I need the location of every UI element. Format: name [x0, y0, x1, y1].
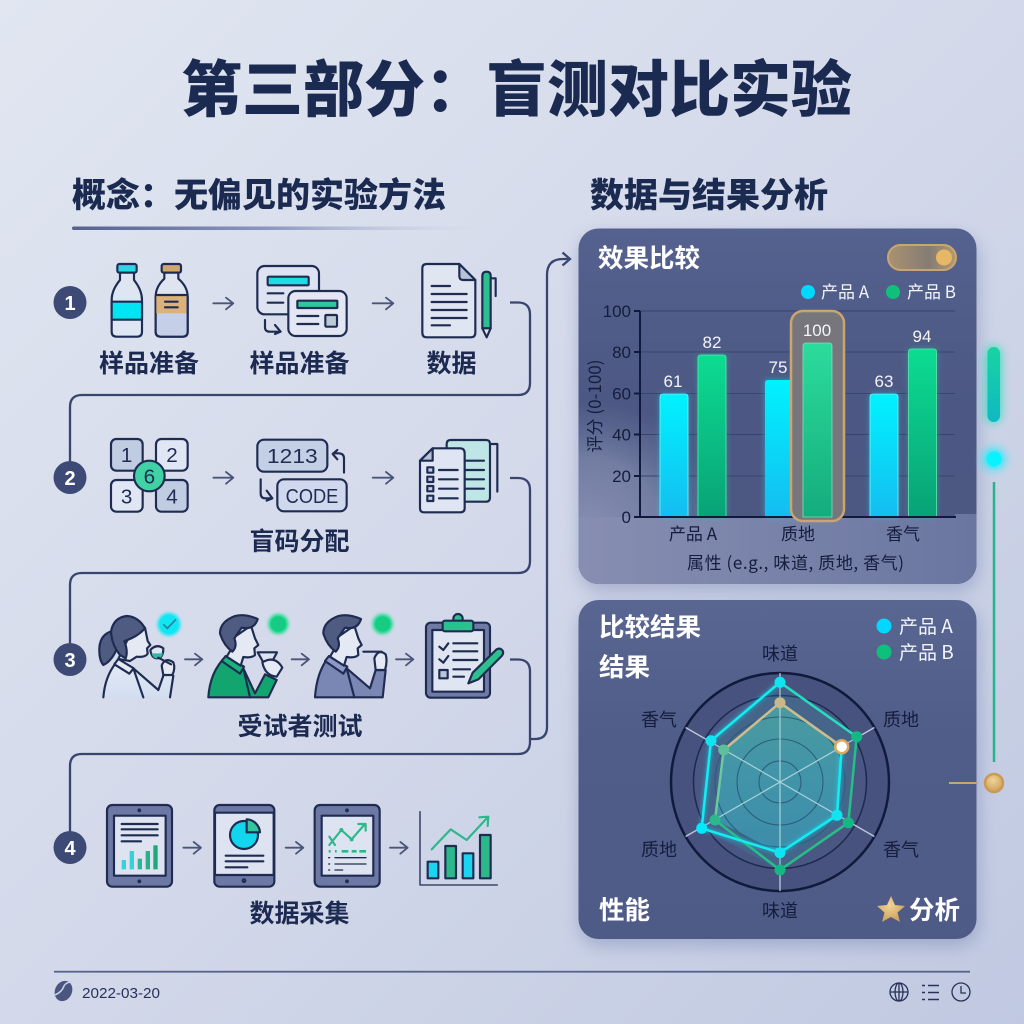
label: blind coding: 盲码分配	[249, 522, 350, 558]
radar labels: 质地	[883, 706, 919, 732]
arrow	[183, 842, 201, 854]
person: man with spoon	[315, 615, 387, 697]
icon: tablet with report	[107, 805, 172, 887]
y axis ticks: 100	[603, 302, 631, 321]
icon: number grid	[111, 439, 188, 512]
legend: 产品 B	[907, 278, 956, 303]
arrow	[373, 298, 393, 309]
y axis ticks: 20	[612, 467, 631, 486]
y axis ticks: 40	[612, 426, 631, 444]
step 4 number	[54, 831, 86, 864]
person: man drinking	[208, 615, 282, 697]
badge: green	[268, 614, 288, 634]
x axis labels: 香气	[886, 520, 920, 545]
panel title: 结果	[599, 654, 650, 682]
value labels: 94	[913, 327, 931, 346]
icon: number grid: 4	[166, 486, 178, 509]
core fill	[715, 703, 842, 853]
icon: number grid: 2	[166, 444, 178, 467]
icon: code assignment	[257, 440, 347, 511]
heading: data analysis: 数据与结果分析	[590, 168, 828, 217]
radar labels: 质地	[641, 836, 677, 862]
badge: cyan check	[158, 613, 180, 636]
toggle	[888, 245, 956, 270]
panel: radar chart	[578, 600, 978, 945]
step 2 number	[54, 461, 86, 494]
radar labels: 香气	[641, 706, 677, 732]
value labels: 63	[875, 372, 893, 391]
y axis ticks: 0	[622, 508, 631, 527]
icon: clipboard	[426, 614, 503, 698]
y axis ticks: 60	[612, 384, 631, 404]
icon: growth bar chart	[420, 812, 497, 885]
value labels: 75	[769, 358, 787, 377]
title: 第三部分：盲测对比实验	[181, 40, 852, 129]
icon: tablet with line chart	[315, 805, 380, 887]
series A line	[702, 682, 842, 853]
legend: 产品 A	[821, 278, 870, 303]
value labels: 100	[803, 321, 831, 340]
arrow	[185, 654, 202, 665]
arrow	[213, 472, 233, 484]
highlight box	[791, 311, 844, 521]
icon: number grid: 1	[121, 444, 132, 467]
badge: green	[373, 614, 393, 634]
icon: bottle B	[156, 264, 188, 337]
footer logo	[51, 978, 76, 1004]
icon: tablet with pie chart	[214, 805, 274, 887]
footer date: 2022-03-20	[82, 985, 160, 1002]
label: analysis: 分析	[909, 890, 960, 927]
side indicator: cyan dot	[984, 449, 1004, 469]
step 3 number: 3	[64, 650, 76, 672]
step 1 number	[54, 286, 86, 319]
icon: number grid: 3	[121, 486, 132, 509]
x axis labels	[669, 520, 920, 545]
panel title	[599, 614, 701, 682]
legend: 产品 A	[899, 612, 953, 639]
y axis ticks	[603, 302, 631, 527]
label: data collection: 数据采集	[249, 894, 350, 930]
step 3 icons	[99, 613, 503, 698]
icon: star	[877, 896, 905, 922]
arrow	[390, 842, 408, 854]
label: data: 数据	[426, 344, 477, 380]
icon: code assignment: 1213	[267, 445, 318, 468]
arrow	[286, 842, 303, 854]
points	[696, 677, 862, 876]
step 4 number: 4	[64, 838, 76, 860]
x axis labels: 质地	[781, 520, 815, 545]
panel: bar chart	[578, 228, 978, 590]
step 2 icons	[111, 439, 497, 512]
icon: number grid: 6	[144, 465, 155, 488]
axes	[634, 311, 956, 517]
arrow	[396, 654, 413, 665]
panel title: 效果比较	[598, 238, 701, 275]
radar labels: 味道	[762, 897, 798, 923]
glow	[702, 682, 842, 853]
radar labels: 味道	[762, 640, 798, 666]
step 1 number: 1	[64, 293, 76, 315]
radar labels: 香气	[883, 836, 919, 862]
radar	[671, 673, 889, 891]
x axis labels: 产品 A	[669, 520, 718, 545]
icon: code assignment: CODE	[286, 485, 338, 508]
step 2 number: 2	[64, 468, 76, 490]
step 3 number	[54, 643, 86, 676]
legend: 产品 B	[899, 638, 954, 665]
label: sample prep 1: 样品准备	[99, 344, 199, 380]
icon: pen	[482, 272, 496, 337]
icon: bottle A	[112, 264, 142, 337]
side indicator: line	[993, 482, 995, 762]
arrow	[373, 472, 393, 484]
bars	[660, 349, 936, 517]
flow connectors	[70, 252, 570, 832]
series B line	[715, 682, 857, 870]
label: sample prep 2: 样品准备	[249, 344, 350, 380]
step 4 icons	[107, 805, 497, 887]
icon: document stack	[420, 440, 497, 512]
outer fill	[702, 682, 857, 870]
value labels: 61	[664, 372, 682, 391]
footer icon: list	[922, 986, 939, 1000]
legend	[801, 278, 956, 303]
label: participant test: 受试者测试	[237, 707, 363, 743]
y axis title: 评分 (0-100)	[581, 360, 606, 452]
person: woman tasting	[99, 616, 174, 697]
legend	[876, 612, 954, 665]
panel title: 比较结果	[599, 614, 701, 642]
icon: sample cards	[257, 266, 347, 336]
side indicator: capsule	[987, 347, 1000, 422]
side indicator: gold node	[949, 774, 1003, 792]
x axis title: 属性 (e.g., 味道, 质地, 香气)	[687, 549, 904, 574]
step 1 icons	[112, 264, 496, 337]
value labels	[664, 321, 931, 391]
heading: concept: 概念：无偏见的实验方法	[72, 168, 446, 217]
y axis ticks: 80	[612, 343, 631, 362]
footer icon: globe	[890, 983, 908, 1001]
label: performance: 性能	[599, 890, 650, 927]
footer icon: clock	[952, 983, 970, 1001]
radar labels	[641, 640, 919, 923]
arrow	[213, 298, 233, 309]
arrow	[292, 654, 309, 665]
value labels: 82	[703, 333, 721, 352]
icon: document	[422, 264, 475, 337]
